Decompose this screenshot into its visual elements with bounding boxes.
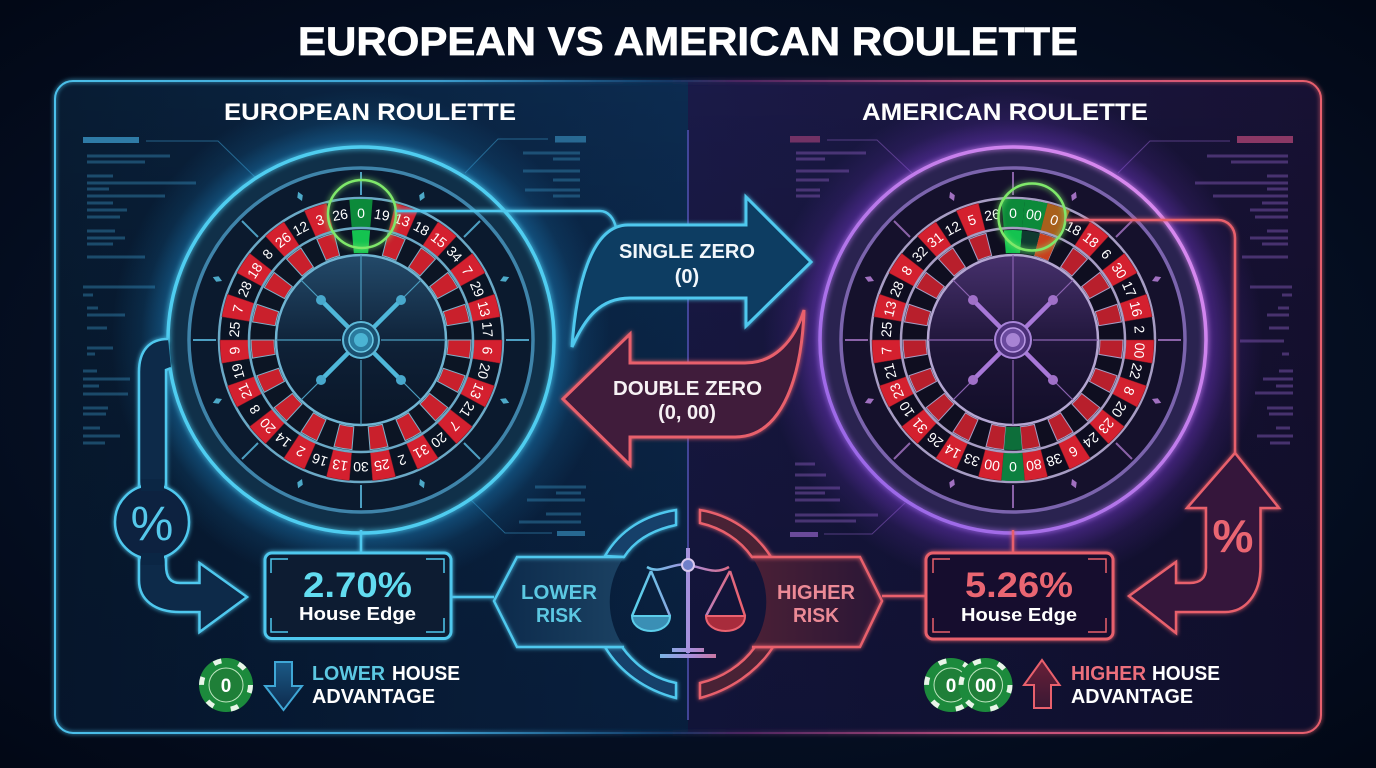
label: higher house advantage: HOUSE	[1152, 663, 1220, 685]
wheel numbers: European: 12	[290, 217, 311, 239]
icon: down arrow	[265, 662, 302, 710]
wheel numbers: European: 31	[411, 441, 432, 463]
connector lines: American	[882, 530, 1013, 596]
wheel numbers: European: 20	[256, 415, 279, 437]
wheel numbers: American: 30	[1108, 260, 1130, 282]
wheel numbers: American: 23	[886, 380, 907, 401]
wheel numbers: American: 32	[908, 243, 931, 265]
wheel numbers: American: 28	[886, 278, 907, 299]
wheel numbers: American: 6	[1098, 246, 1115, 262]
wheel numbers: European: 13	[474, 299, 494, 319]
wheel numbers: American: 26	[983, 206, 1001, 224]
title: EUROPEAN VS AMERICAN ROULETTE	[298, 20, 1078, 64]
house edge box: American 5.26%	[926, 553, 1113, 639]
risk badge: lower risk	[494, 510, 676, 698]
wheel numbers: American: 18	[1063, 218, 1084, 239]
heading: American Roulette: AMERICAN ROULETTE	[862, 99, 1148, 126]
arrow: percent flow into American house edge	[1129, 453, 1279, 633]
connector: American zeros to up arrow	[1066, 220, 1235, 453]
chip: single zero	[199, 658, 253, 712]
wheel numbers: European: 8	[246, 402, 264, 417]
chips: double zero: 0	[946, 676, 956, 697]
wheel numbers: American: 17	[1119, 279, 1140, 300]
label: lower house advantage: LOWER	[312, 663, 386, 685]
wheel numbers: European: 2	[293, 443, 308, 461]
wheel numbers: American: 21	[880, 361, 900, 381]
arrow: single zero: SINGLE ZERO	[619, 241, 755, 263]
wheel numbers: European: 26	[272, 229, 294, 251]
wheel numbers: American: 0	[1048, 211, 1061, 229]
label: lower house advantage: HOUSE	[392, 663, 460, 685]
wheel numbers: American: 80	[1025, 456, 1043, 474]
wheel numbers: European: 30	[353, 459, 369, 475]
label: higher house advantage: ADVANTAGE	[1071, 686, 1193, 708]
wheel numbers: American: 6	[1066, 443, 1081, 461]
chip: single zero: 0	[221, 676, 231, 697]
wheel numbers: European: 25	[373, 456, 391, 474]
wheel numbers: American: 20	[1108, 399, 1130, 421]
wheel numbers: American: 18	[1080, 229, 1102, 251]
wheel numbers: European: 21	[234, 380, 255, 401]
arrow: single zero	[572, 197, 811, 347]
risk badge: higher risk: HIGHER	[777, 582, 856, 604]
wheel numbers: American: 16	[1126, 299, 1146, 319]
wheel numbers: American: 8	[898, 263, 916, 278]
wheel numbers: European: 15	[428, 229, 450, 251]
icon: up arrow	[1024, 660, 1060, 708]
wheel numbers: European: 13	[467, 381, 488, 402]
icon: balance scale	[632, 548, 745, 656]
wheel numbers: American: 12	[942, 217, 963, 239]
zero highlight ring: American	[998, 184, 1066, 250]
house edge box: American 5.26%: House Edge	[961, 605, 1077, 625]
wheel numbers: American: 24	[1080, 429, 1102, 451]
wheel numbers: American: 5	[965, 211, 978, 229]
house edge box: American 5.26%: 5.26%	[965, 566, 1073, 605]
wheel numbers: European: 20	[474, 362, 494, 381]
house edge box: European 2.70%	[265, 553, 451, 638]
label: lower house advantage: ADVANTAGE	[312, 686, 435, 708]
zero highlight ring: European	[328, 180, 396, 248]
wheel numbers: European: 0	[357, 205, 365, 221]
chips: double zero	[924, 658, 1012, 712]
wheel numbers: European: 6	[479, 346, 496, 355]
wheel numbers: American: 0	[1009, 205, 1017, 221]
American roulette wheel	[763, 90, 1263, 590]
wheel numbers: European: 2	[396, 451, 409, 469]
wheel numbers: American: 7	[878, 346, 895, 355]
connector lines: European	[361, 530, 494, 597]
risk badge: lower risk: LOWER	[521, 582, 598, 604]
wheel numbers: European: 14	[272, 429, 294, 451]
wheel numbers: American: 14	[942, 441, 963, 462]
wheel numbers: European: 7	[229, 303, 247, 315]
wheel numbers: European: 13	[392, 210, 412, 230]
wheel numbers: American: 26	[924, 429, 946, 451]
house edge box: European 2.70%: 2.70%	[303, 566, 412, 605]
European roulette wheel	[111, 90, 611, 590]
wheel numbers: European: 19	[228, 361, 248, 381]
wheel numbers: European: 3	[313, 211, 326, 229]
wheel numbers: European: 28	[234, 278, 255, 299]
wheel numbers: American: 22	[1126, 362, 1146, 381]
wheel numbers: European: 29	[467, 279, 488, 300]
wheel numbers: European: 17	[479, 321, 496, 338]
risk badge: lower risk: RISK	[536, 605, 583, 627]
wheel numbers: American: 31	[908, 415, 931, 437]
label: lower house advantage	[312, 663, 460, 708]
wheel numbers: European: 7	[458, 263, 476, 278]
wheel numbers: American	[878, 205, 1148, 475]
label: higher house advantage: HIGHER	[1071, 663, 1147, 685]
data readouts: American side	[790, 136, 1293, 537]
wheel numbers: American: 25	[878, 321, 895, 338]
wheel numbers: European: 18	[411, 218, 432, 239]
connector: European zero to Single Zero arrow	[396, 211, 616, 228]
panel: comparison frame	[55, 81, 1321, 733]
label: higher house advantage	[1071, 663, 1220, 708]
wheel numbers: American: 38	[1044, 450, 1064, 470]
wheel numbers: European: 13	[331, 456, 349, 474]
arrow: percent flow into American house edge: %	[1213, 510, 1253, 562]
wheel numbers: European: 19	[373, 206, 391, 224]
wheel numbers: American: 00	[1131, 342, 1148, 359]
wheel numbers: European: 9	[226, 346, 243, 355]
arrow: double zero: (0, 00)	[658, 402, 716, 424]
arrow: percent flow into European house edge: %	[131, 498, 173, 551]
chips: double zero: 00	[975, 676, 996, 697]
wheel numbers: European: 18	[244, 259, 266, 281]
risk badge: higher risk: RISK	[793, 605, 840, 627]
wheel numbers: European: 20	[428, 429, 450, 451]
data readouts: European side	[83, 136, 586, 536]
heading: European Roulette: EUROPEAN ROULETTE	[224, 99, 516, 126]
wheel numbers: European: 21	[456, 399, 478, 421]
arrow: single zero: (0)	[675, 266, 699, 288]
wheel numbers: American: 31	[924, 229, 946, 251]
wheel numbers: European: 25	[226, 321, 243, 338]
wheel numbers: American: 00	[983, 456, 1001, 474]
wheel numbers: European: 8	[259, 246, 276, 262]
risk badge: higher risk	[700, 510, 882, 698]
arrow: double zero: DOUBLE ZERO	[613, 378, 762, 400]
house edge box: European 2.70%: House Edge	[299, 604, 416, 624]
arrow: percent flow into European house edge	[115, 339, 247, 632]
wheel numbers: American: 23	[1095, 415, 1118, 437]
wheel numbers: European: 7	[446, 418, 463, 434]
wheel numbers: European: 26	[331, 206, 349, 224]
wheel numbers: American: 8	[1120, 384, 1138, 398]
wheel numbers: European	[226, 205, 496, 475]
wheel numbers: European: 34	[443, 243, 466, 265]
wheel numbers: American: 2	[1131, 325, 1148, 334]
wheel numbers: American: 0	[1009, 459, 1017, 475]
wheel numbers: American: 00	[1025, 206, 1043, 224]
wheel numbers: American: 13	[880, 299, 900, 318]
arrow: double zero	[563, 310, 804, 465]
wheel numbers: American: 33	[962, 450, 982, 470]
wheel numbers: American: 10	[896, 398, 918, 420]
wheel numbers: European: 16	[310, 450, 330, 470]
